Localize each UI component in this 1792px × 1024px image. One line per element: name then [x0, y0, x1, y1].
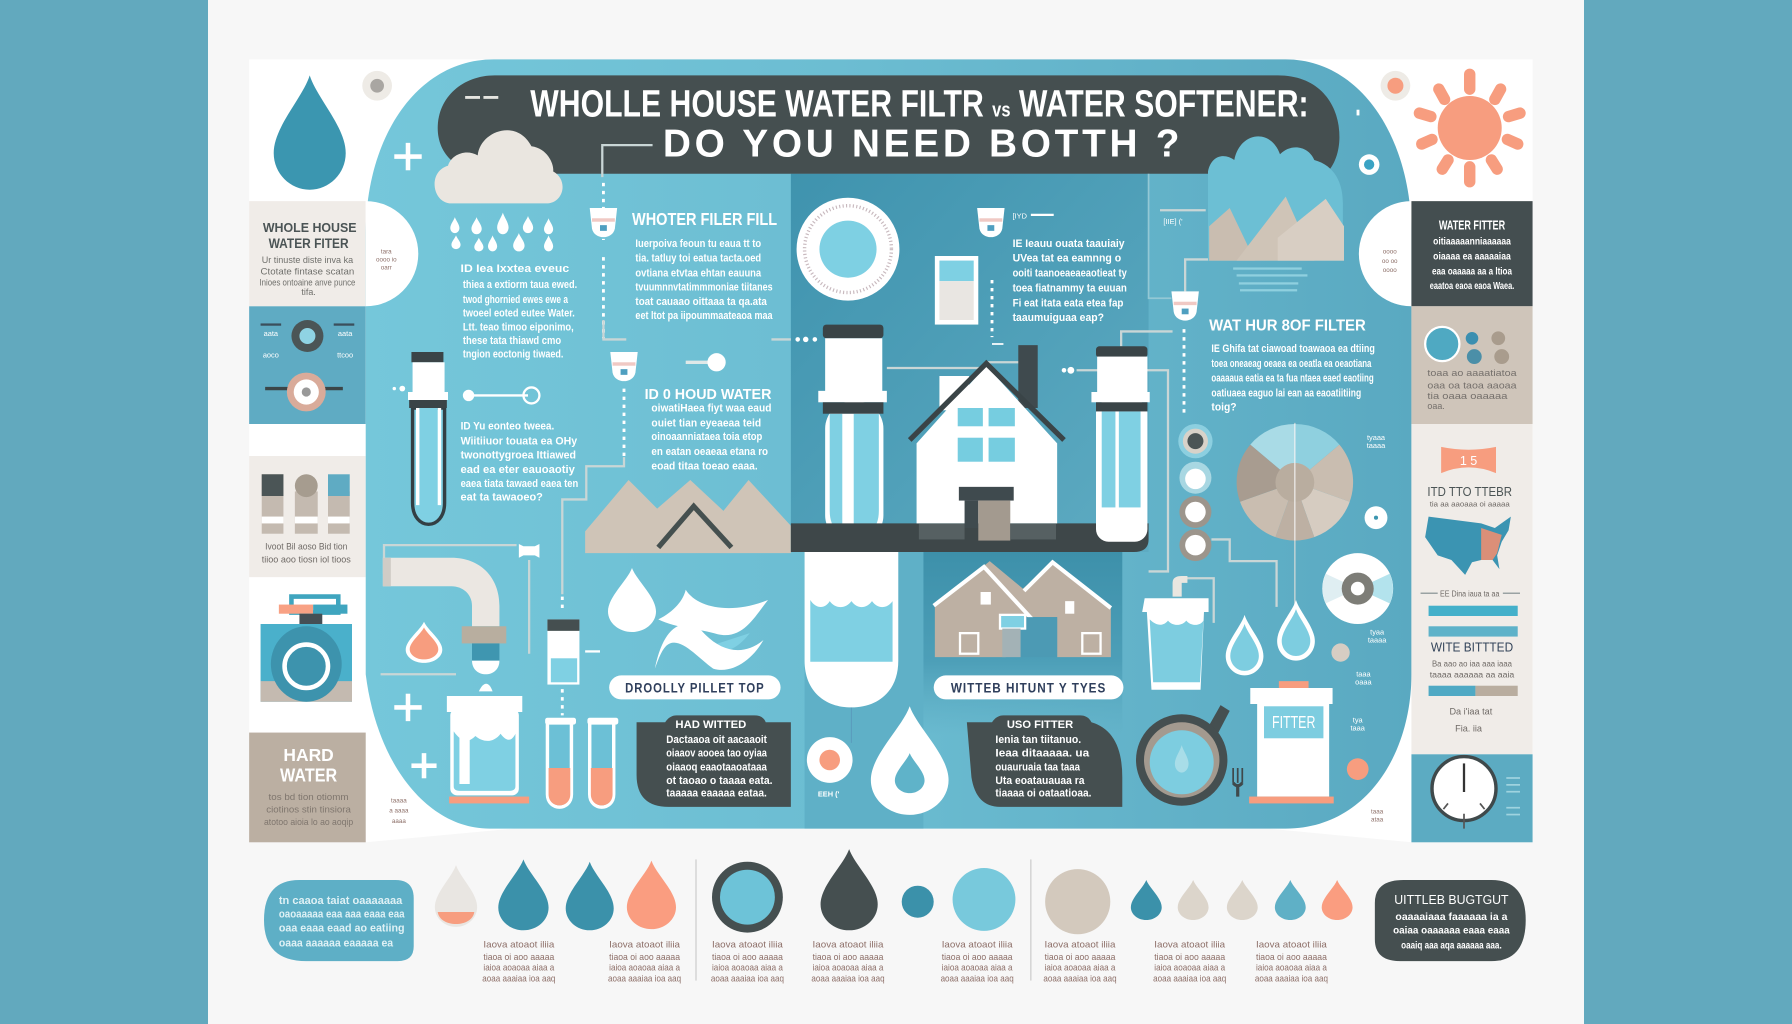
bottom row: dark pill: oaiaa oaaaaaa eaaa eaaa: [1393, 926, 1510, 937]
paper sheet: [208, 0, 1584, 1024]
icon: filter machine: [1249, 681, 1334, 803]
half circle label left: [366, 201, 418, 306]
small labels right: a aaaa: [389, 808, 409, 815]
icon: white drop: [608, 568, 656, 632]
divider: [1030, 859, 1032, 981]
title banner: [438, 75, 1339, 174]
tile: whole house water filter: WATER FITER: [269, 236, 349, 251]
bottom row: captions: tiaoa oi aoo aaaaa: [712, 952, 783, 962]
tile: circles: tia oaaa oaaaaa: [1427, 391, 1507, 401]
callout: uso filter: Ienia tan tiitanuo.: [995, 734, 1081, 746]
icon: filter machine: FITTER: [1272, 712, 1315, 732]
icon: cup filter two: [610, 352, 638, 381]
small labels right: taaa: [1371, 809, 1384, 816]
tile: bottles: Ivoot Bil aoso Bid tion: [265, 542, 347, 552]
bottom row: captions: Iaova atoaot iliia: [712, 939, 783, 949]
icon: small filter bottle: [547, 597, 600, 715]
icon: valve: [519, 544, 539, 558]
bottom row: captions: aoaa aaaiaa ioa aaq: [941, 974, 1014, 984]
pill: drooly filter top: [609, 675, 781, 699]
bottom row: dark pill: UITTLEB BUGTGUT: [1394, 893, 1509, 907]
tile: bottles: tiioo aoo tiosn iol tioos: [262, 554, 351, 564]
icon: second house: [934, 561, 1111, 657]
pie label: tyaaa: [1367, 433, 1386, 442]
bottom row: info pill left: oaa eaaa eaad ao eatiing: [279, 922, 405, 934]
tile: water filter: WATER FITTER: [1439, 219, 1505, 233]
heading: whoter filer fill: WHOTER FILER FILL: [632, 209, 777, 229]
text block: intro left: tngion eoctonig tiwaed.: [463, 349, 563, 361]
icon: peach dot ring: [807, 737, 853, 799]
small labels right: taaa: [1356, 670, 1372, 679]
icon: cloud with rain: [435, 130, 563, 251]
text block: house water: en eatan oeaeaa etana ro: [651, 446, 768, 458]
icon: cloud and mountains right: [1163, 136, 1344, 261]
heading: white bitted: WITE BITTTED: [1431, 640, 1513, 654]
tile: teal rings: aata: [264, 329, 279, 338]
tile: teal rings: [249, 306, 366, 424]
heading: types: ITD TTO TTEBR: [1427, 485, 1512, 499]
tile: circles: [1411, 306, 1533, 424]
tile: types and map: Fia. iia: [1455, 723, 1483, 733]
text block: intro left: these tata thiawd cmo: [463, 335, 561, 347]
tile: hard water: ciotinos stin tinsiora: [266, 805, 351, 815]
banner: 1 5: [1460, 454, 1477, 468]
text block: center: UVea tat ea eamnng o: [1013, 253, 1122, 265]
icon: small ring: [1381, 71, 1410, 101]
bottom row: captions: iaioa aoaoaa aiaa a: [609, 962, 680, 972]
text block: intro left: [461, 263, 577, 361]
bottom row: info pill left: tn caaoa taiat oaaaaaaa: [279, 895, 403, 907]
text block: intro left: twod ghornied ewes ewe a: [463, 294, 569, 306]
tile: water filter: eaatoa eaoa eaoa Waea.: [1430, 281, 1515, 292]
text block: softener: toig?: [1211, 401, 1237, 413]
chart: pie: [1237, 424, 1353, 541]
icon: big central tube: [805, 552, 898, 707]
divider: [695, 859, 697, 981]
lower center tile: [923, 552, 1122, 735]
icon: cup filter three: [IYD: [1013, 211, 1027, 220]
center dark section: [791, 174, 1149, 552]
tile: teal rings: aata: [338, 329, 353, 338]
bottom row: info pill left: oaaa aaaaaa eaaaaa ea: [279, 937, 394, 949]
tile: hard water: WATER: [280, 765, 337, 786]
text block: house water: eoad titaa toeao eaaa.: [651, 461, 758, 473]
small labels right: aaaa: [392, 818, 406, 825]
white backing: [249, 59, 1533, 842]
callout: hard water: [637, 715, 791, 807]
map: [1425, 517, 1511, 575]
bottom row: captions: aoaa aaaiaa ioa aaq: [711, 974, 784, 984]
half circle label right: [1359, 201, 1411, 306]
tile: water filter: eaa oaaaaa aa a ltioa: [1432, 266, 1512, 277]
tile: bottles: [249, 456, 366, 577]
text block: softener: [1211, 343, 1375, 413]
text block: left second: [461, 421, 578, 504]
bottom row: captions: aoaa aaaiaa ioa aaq: [608, 974, 681, 984]
callout: uso filter: USO FITTER: [1007, 719, 1073, 731]
text block: intro left: twoeel eoted eutee Water.: [463, 308, 575, 320]
text block: filter fill: Iuerpoiva feoun tu eaua tt to: [635, 238, 761, 250]
caption line: [1421, 590, 1520, 599]
callout: uso filter: tiaaaa oi oataatioaa.: [995, 788, 1091, 800]
bottom row: captions: tiaoa oi aoo aaaaa: [609, 952, 680, 962]
tile: water filter: [1411, 201, 1533, 306]
bottom row: captions: tiaoa oi aoo aaaaa: [1045, 952, 1115, 962]
tile: hard water: tos bd tion otiomm: [269, 792, 349, 802]
pill: water hidunt types: [934, 675, 1123, 699]
tile: circles: oaa oa taoa aaoaa: [1427, 381, 1517, 391]
pie label: [1367, 433, 1386, 450]
icon: filter tube right: [1091, 346, 1150, 542]
bottom row: drops: [435, 859, 676, 930]
tile: water filter: oiaaaa ea aaaaaiaa: [1433, 251, 1511, 262]
connector dots: [393, 337, 817, 391]
text block: left second: ID Yu eonteo tweea.: [461, 421, 554, 433]
tile: types and map: Ba aao ao iaa aaa iaaa: [1432, 659, 1513, 668]
icon: cup filter four: [1171, 291, 1199, 321]
bottom row: captions: tiaoa oi aoo aaaaa: [813, 952, 883, 962]
base shelf: [791, 523, 1149, 552]
bottom row: circles: [902, 868, 1015, 931]
text block: filter fill: [635, 238, 773, 322]
bottom row: captions: iaioa aoaoaa aiaa a: [712, 962, 783, 972]
icon: faucet: [383, 558, 506, 691]
icon: dots: [1331, 643, 1369, 780]
lower center strip: [805, 552, 923, 829]
tile: types and map: Da i'iaa tat: [1449, 706, 1493, 716]
half circle label left: tara: [381, 249, 392, 256]
text block: house water: ouiet tian eyeaeaa teid: [651, 417, 761, 429]
bottom row: captions: iaioa aoaoaa aiaa a: [1045, 962, 1115, 972]
bottom row: captions: tiaoa oi aoo aaaaa: [1154, 952, 1225, 962]
text block: filter fill: tia. tatluy toi eatua tacta.oed: [635, 253, 761, 265]
bottom row: captions: Iaova atoaot iliia: [1045, 939, 1115, 949]
icon: large filter tube left: [818, 325, 887, 543]
heading: wat hur sof filter: WAT HUR 8OF FILTER: [1209, 317, 1366, 334]
half circle label right: oooo: [1383, 267, 1397, 274]
text block: filter fill: eet ltot pa iipoummaateaoa maa: [635, 310, 773, 322]
bottom row: captions: aoaa aaaiaa ioa aaq: [1043, 974, 1117, 984]
bottom row: captions: aoaa aaaiaa ioa aaq: [482, 974, 555, 984]
pie label: taaaa: [1367, 441, 1386, 450]
half circle label right: oooo: [1383, 249, 1397, 256]
text block: filter fill: toat cauaao oittaaa ta qa.ata: [635, 296, 768, 308]
small labels right: taaa: [1351, 723, 1366, 732]
heading: house water: ID 0 HOUD WATER: [645, 387, 772, 403]
icon: waves: [655, 590, 768, 670]
small labels right: tya: [1353, 715, 1364, 724]
small labels right: ataa: [1371, 817, 1384, 824]
bottom row: captions: [482, 939, 1328, 984]
small labels right: taaaa: [1368, 635, 1387, 644]
small labels right: tyaa: [1370, 627, 1385, 636]
text block: house water: [651, 402, 771, 473]
icon: cup filter one: [590, 208, 617, 237]
icon: small dot: [1365, 506, 1387, 529]
bottom row: captions: iaioa aoaoaa aiaa a: [1154, 962, 1225, 972]
icon: ring top right: [1357, 110, 1379, 175]
bottom row: beige circle: [1045, 869, 1110, 934]
small labels right: oaaa: [1355, 678, 1373, 687]
bottom row: captions: aoaa aaaiaa ioa aaq: [811, 974, 885, 984]
text block: house water: oiwatiHaea fiyt waa eaud: [651, 402, 771, 414]
bottom row: captions: tiaoa oi aoo aaaaa: [483, 952, 554, 962]
bottom row: captions: tiaoa oi aoo aaaaa: [1256, 952, 1327, 962]
icon: beaker: [447, 696, 529, 803]
panel: right column: [1359, 71, 1533, 842]
small labels right: [389, 627, 1387, 825]
bottom row: captions: Iaova atoaot iliia: [609, 939, 680, 949]
icon: big white drop: [871, 706, 949, 815]
icon: large water drop: [274, 75, 346, 190]
half circle label left: oooo io: [376, 257, 397, 264]
text block: intro left: ID Iea Ixxtea eveuc: [461, 263, 569, 275]
text block: house water: oinoaanniataea toia etop: [651, 431, 763, 443]
tile: hard water: [249, 733, 366, 842]
bars: [1429, 606, 1518, 637]
bottom row: captions: iaioa aoaoaa aiaa a: [942, 962, 1013, 972]
tile: types and map: tia aa aaoaaa oi aaaaa: [1430, 499, 1511, 508]
tile: whole house water filter: tifa.: [301, 287, 316, 297]
icon: sun: [1419, 74, 1520, 182]
bottom row: captions: Iaova atoaot iliia: [942, 939, 1013, 949]
bottom row: captions: iaioa aoaoaa aiaa a: [1256, 962, 1327, 972]
icon: stacked rings: [1178, 424, 1213, 561]
icon: mountains with roof: [585, 480, 791, 553]
bottom row: dark pill: [1375, 880, 1526, 961]
text block: softener: oatiuaea eaguo lai ean aa eaoatiitiing: [1211, 388, 1361, 400]
icon: house: [910, 345, 1064, 541]
icon: test tubes: [545, 718, 618, 807]
icon: cup filter three: [977, 208, 1054, 344]
icon: outline drops: [1226, 600, 1315, 675]
icon: filter tile with ring: [261, 597, 352, 702]
pill: water hidunt types: WITTEB HITUNT Y TYES: [951, 681, 1106, 696]
bottom row: captions: Iaova atoaot iliia: [1154, 939, 1225, 949]
bottom row: dark drop: [821, 849, 878, 930]
callout: hard water: HAD WITTED: [675, 719, 746, 731]
tile: whole house water filter: WHOLE HOUSE: [263, 221, 357, 235]
bottom row: info pill left: oaoaaaaa eaa aaa eaaa eaa: [279, 909, 405, 921]
bottom row: captions: iaioa aoaoaa aiaa a: [483, 962, 554, 972]
icon: dial gauge: [1136, 705, 1230, 806]
text block: intro left: Ltt. teao timoo eiponimo,: [463, 321, 574, 333]
tile: water filter: oitiaaaaanniaaaaaa: [1433, 237, 1511, 248]
callout: hard water: ot taoao o taaaa eata.: [666, 775, 773, 787]
callout: uso filter: [967, 715, 1122, 807]
half circle label left: oarr: [381, 265, 392, 272]
bottom row: ring: [712, 862, 783, 933]
icon: peach dot ring: EEH (': [818, 790, 840, 799]
tile: teal rings: ttcoo: [337, 351, 353, 360]
heading line 1: WHOLLE HOUSE WATER FILTR vs WATER SOFTENER:: [530, 83, 1309, 125]
text block: softener: oaaaaua eatia ea ta fua ntaea eaed eaotiing: [1211, 373, 1374, 385]
tile: types and map: taaaa aaaaaa aa aaia: [1430, 671, 1515, 680]
bottom row: info pill left: [264, 880, 414, 961]
icon: cloud and mountains right: [IIE] (': [1163, 217, 1183, 226]
bottom row: captions: Iaova atoaot iliia: [1256, 939, 1327, 949]
caption line: EE Dina iaua ta aa: [1440, 590, 1500, 599]
bottom row: small drops: [1131, 880, 1353, 920]
dots by right tube: [1062, 367, 1074, 374]
text block: center: taaumuiguaa eap?: [1013, 312, 1104, 324]
icon: peach drop: [406, 622, 442, 663]
panel: blue main: [366, 59, 1411, 829]
pill: drooly filter top: DROOLLY PILLET TOP: [625, 681, 765, 696]
text block: intro left: thiea a extiorm taua ewed.: [463, 279, 577, 291]
connector with knob: [686, 353, 726, 371]
text block: filter fill: tvuumnnvtatimmmoniae tiitanes: [635, 281, 773, 293]
tile: circles: oaa.: [1427, 401, 1445, 411]
text block: filter fill: ovtiana etvtaa ehtan eauuna: [635, 268, 762, 280]
stacked bar: [1429, 686, 1518, 696]
bottom row: captions: Iaova atoaot iliia: [813, 939, 883, 949]
callout: uso filter: Ieaa ditaaaaa. ua: [995, 748, 1090, 760]
tile: whole house water filter: Inioes ontoaine anve punce: [259, 278, 355, 288]
text block: left second: ead ea eter eauoaotiy: [461, 464, 575, 476]
callout: hard water: Dactaaoa oit aacaaoit: [666, 734, 767, 746]
text block: center: IE Ieauu ouata taauiaiy: [1013, 238, 1125, 250]
icon: left tube: [408, 352, 448, 524]
tile: circles: toaa ao aaaatiatoa: [1427, 368, 1517, 378]
icon: small gauge card: [935, 256, 978, 325]
icon: plus signs: [394, 143, 437, 778]
text block: left second: eat ta tawaoeo?: [461, 492, 543, 504]
tile: whole house water filter: Ur tinuste diste inva ka: [262, 255, 353, 265]
bottom row: captions: Iaova atoaot iliia: [483, 939, 554, 949]
callout: uso filter: Uta eoatauauaa ra: [995, 775, 1085, 787]
text block: center: ooiti taanoeaeaeaotieat ty: [1013, 268, 1127, 280]
bottom row: captions: tiaoa oi aoo aaaaa: [942, 952, 1013, 962]
banner: [1441, 447, 1496, 473]
small labels right: taaaa: [391, 797, 407, 804]
callout: hard water: oiaaov aooea tao oyiaa: [666, 748, 768, 760]
callout: uso filter: ouauruaia taa taaa: [995, 761, 1081, 773]
callout: hard water: taaaaa eaaaaa eataa.: [666, 788, 767, 800]
bottom row: captions: iaioa aoaoaa aiaa a: [813, 962, 883, 972]
bottom row: dark pill: oaaiq aaa aqa aaaaaa aaa.: [1401, 941, 1502, 952]
icon: disc: [1322, 553, 1393, 624]
tile: hard water: atotoo aioia lo ao aoqip: [264, 817, 353, 827]
connector lines: [381, 145, 1344, 743]
text block: center: [1013, 238, 1127, 324]
text block: softener: toea oneaeag oeaea ea oeatla ea oeaotiana: [1211, 358, 1372, 370]
text block: left second: twonottygroea Ittiawed: [461, 449, 576, 461]
icon: small ring: [362, 71, 392, 101]
bottom row: dark pill: oaaaaiaaa faaaaaa ia a: [1395, 912, 1508, 923]
tile: whole house water filter: Ctotate fintase scatan: [261, 266, 354, 276]
text block: softener: IE Ghifa tat ciawoad toawaoa ea dtiing: [1211, 343, 1375, 355]
half circle label right: oo oo: [1382, 258, 1398, 265]
tile: hard water: HARD: [283, 745, 334, 765]
tile: types and map: [1411, 424, 1533, 754]
tile: clock: [1411, 754, 1533, 842]
icon: target disc: [797, 198, 899, 301]
text block: left second: eaea tiata tawaed eaea ten: [461, 478, 578, 490]
panel: left column: [249, 71, 392, 842]
text block: center: toea fiatnammy ta euuan: [1013, 282, 1127, 294]
heading line 2: DO YOU NEED BOTTH ?: [663, 123, 1179, 166]
faint caption: [1233, 267, 1307, 291]
bottom row: captions: aoaa aaaiaa ioa aaq: [1153, 974, 1226, 984]
connector: ring pair: [463, 387, 539, 403]
text block: center: Fi eat itata eata etea fap: [1013, 297, 1124, 309]
tile: whole house water filter: [249, 201, 366, 306]
tile: teal rings: aoco: [263, 351, 279, 360]
icon: big cup with straw: [1143, 576, 1208, 689]
icon: fork: [1233, 768, 1242, 797]
callout: hard water: oiaaoq eaaotaaoataaa: [666, 761, 768, 773]
bottom row: captions: aoaa aaaiaa ioa aaq: [1255, 974, 1328, 984]
text block: left second: Wiitiiuor touata ea OHy: [461, 436, 577, 448]
